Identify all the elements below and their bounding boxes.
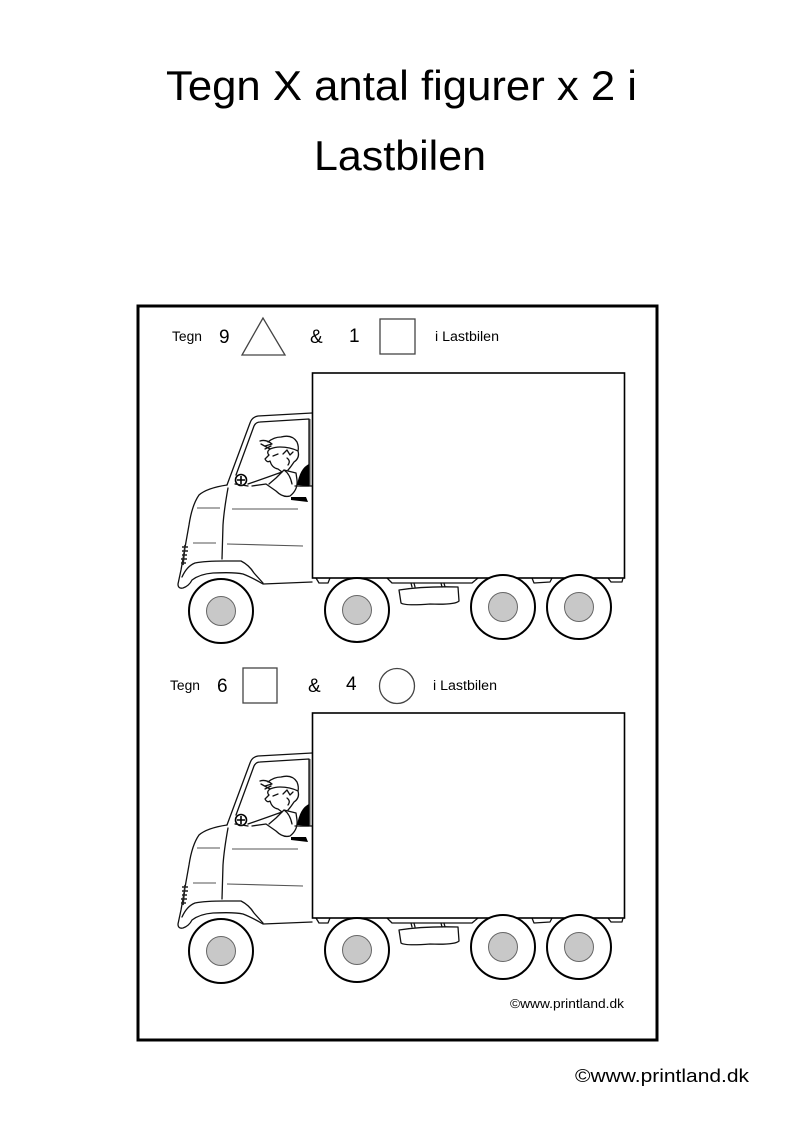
fuel tank bbox=[399, 927, 459, 945]
icon: driver bbox=[235, 436, 309, 502]
wheels bbox=[189, 915, 611, 983]
icon: driver bbox=[235, 776, 309, 842]
instruction row 1: Tegn bbox=[172, 329, 202, 344]
title bbox=[166, 62, 637, 179]
instruction row 2: 4 bbox=[346, 674, 357, 695]
title: Lastbilen bbox=[314, 132, 486, 179]
instruction row 2: i Lastbilen bbox=[433, 678, 497, 693]
instruction row 1: i Lastbilen bbox=[435, 329, 499, 344]
instruction row 1: 1 bbox=[349, 326, 360, 347]
instruction row 1 bbox=[172, 318, 499, 355]
instruction row 2 bbox=[170, 668, 497, 704]
instruction row 2: & bbox=[308, 676, 321, 697]
panel: worksheet frame bbox=[138, 306, 657, 1040]
instruction row 2: 6 bbox=[217, 676, 228, 697]
footer copyright: ©www.printland.dk bbox=[575, 1066, 750, 1086]
cargo box bbox=[312, 713, 624, 918]
instruction row 2: Tegn bbox=[170, 678, 200, 693]
chassis bbox=[316, 918, 623, 923]
fuel tank bbox=[399, 587, 459, 605]
truck 2 bbox=[178, 713, 624, 983]
instruction row 1: & bbox=[310, 327, 323, 348]
inner copyright: ©www.printland.dk bbox=[510, 997, 625, 1011]
cargo box bbox=[312, 373, 624, 578]
wheels bbox=[189, 575, 611, 643]
truck 1 bbox=[178, 373, 624, 643]
chassis bbox=[316, 578, 623, 583]
instruction row 1: 9 bbox=[219, 327, 230, 348]
title: Tegn X antal figurer x 2 i bbox=[166, 62, 637, 109]
